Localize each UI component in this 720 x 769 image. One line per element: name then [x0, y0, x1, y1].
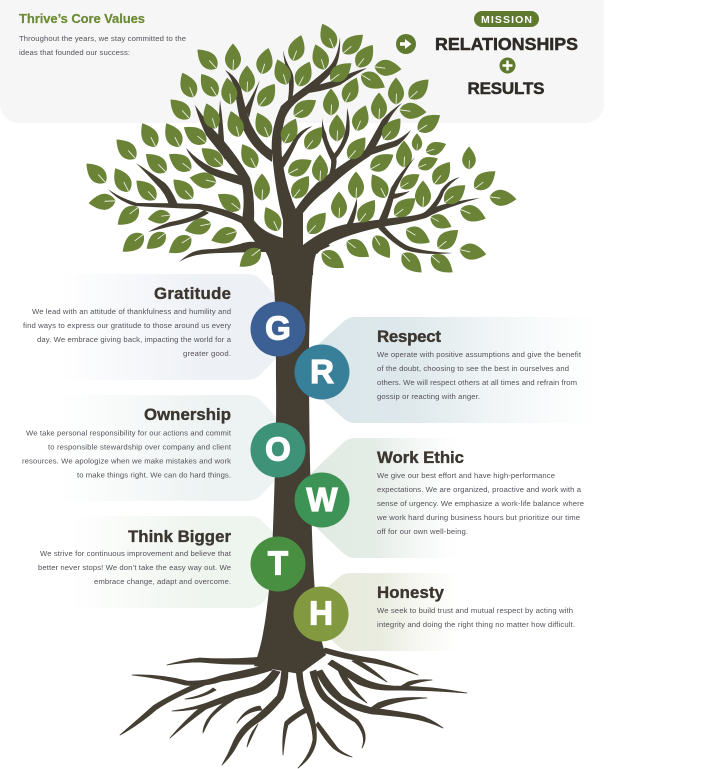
mission badge: MISSION	[481, 14, 532, 26]
Honesty arrow shape	[300, 573, 460, 651]
Respect text: others. We will respect others at all times and refrain from	[377, 378, 577, 387]
Gratitude text: greater good.	[183, 349, 231, 358]
Think Bigger text: better never stops! We don’t take the easy way out. We	[38, 563, 231, 572]
intro text: ideas that founded our success:	[19, 48, 130, 57]
Work Ethic text	[376, 471, 584, 536]
Respect text: gossip or reacting with anger.	[377, 392, 480, 401]
Honesty text	[377, 606, 575, 629]
icon: plus circle	[500, 58, 516, 74]
mission badge	[474, 11, 539, 27]
Ownership heading: Ownership	[144, 405, 231, 424]
tree trunk and branches	[108, 37, 480, 674]
circle: G	[250, 302, 306, 356]
circle: W	[294, 472, 350, 528]
panel: Ownership	[22, 395, 306, 501]
Gratitude text: day. We embrace giving back, impacting the world for a	[37, 335, 232, 344]
circle: O	[250, 422, 306, 478]
Ownership text: We take personal responsibility for our actions and commit	[26, 428, 232, 438]
panel: Respect	[290, 317, 600, 423]
Ownership text: to responsible stewardship over company and client	[48, 442, 232, 452]
Ownership text: to make things right. We can do hard things.	[77, 470, 231, 480]
panel: header	[0, 0, 604, 123]
Respect text	[377, 350, 582, 401]
Think Bigger arrow shape	[70, 516, 303, 608]
Gratitude text: find ways to express our gratitude to those around us every	[23, 321, 231, 330]
Think Bigger text	[38, 549, 232, 586]
intro text	[19, 34, 186, 57]
circle: H: H	[309, 594, 333, 632]
Respect text: of the doubt, choosing to see the best in ourselves and	[377, 364, 569, 373]
Gratitude text: We lead with an attitude of thankfulness and humility and	[32, 307, 231, 316]
Honesty text: integrity and doing the right thing no matter how difficult.	[377, 620, 575, 629]
Gratitude heading: Gratitude	[154, 284, 231, 303]
circle: R: R	[310, 353, 334, 390]
tree illustration	[81, 20, 517, 768]
Honesty heading: Honesty	[377, 583, 445, 602]
Think Bigger heading: Think Bigger	[128, 527, 231, 546]
icon: arrow circle	[396, 34, 416, 54]
Respect text: We operate with positive assumptions and give the benefit	[377, 350, 582, 359]
circle: R	[294, 344, 350, 400]
Work Ethic text: We give our best effort and have high-performance	[377, 471, 555, 480]
Respect heading: Respect	[377, 327, 441, 346]
Work Ethic text: sense of urgency. We emphasize a work-life balance where	[377, 499, 584, 508]
Think Bigger text: We strive for continuous improvement and believe that	[40, 549, 232, 558]
Honesty text: We seek to build trust and mutual respect by acting with	[377, 606, 573, 615]
Work Ethic text: we work hard during business hours but prioritize our time	[376, 513, 580, 522]
circle: G: G	[265, 310, 291, 346]
Think Bigger text: embrace change, adapt and overcome.	[94, 577, 231, 586]
Gratitude text	[23, 307, 232, 358]
heading: Thrive's Core Values: Thrive’s Core Values	[19, 11, 145, 26]
label: relationships: RELATIONSHIPS	[435, 34, 578, 54]
Work Ethic text: expectations. We are organized, proactive and work with a	[377, 485, 582, 494]
Respect arrow shape	[290, 317, 600, 423]
circle: T: T	[268, 544, 288, 582]
circle: W: W	[306, 481, 338, 518]
circle: O: O	[265, 430, 291, 468]
tree leaves	[81, 20, 517, 279]
circle: H	[294, 586, 348, 642]
Work Ethic arrow shape	[285, 438, 460, 558]
panel: Work Ethic	[285, 438, 584, 558]
circle: T	[250, 536, 306, 592]
Ownership text: resources. We apologize when we make mistakes and work	[22, 456, 231, 466]
label: results: RESULTS	[468, 79, 544, 98]
panel: Gratitude	[23, 274, 306, 380]
tree roots	[120, 648, 467, 768]
Ownership text	[22, 428, 232, 480]
header background	[0, 0, 604, 123]
panel: Think Bigger	[38, 516, 303, 608]
Work Ethic heading: Work Ethic	[377, 448, 464, 467]
GROWTH letter circles	[250, 302, 350, 642]
Ownership arrow shape	[60, 395, 306, 501]
Gratitude arrow shape	[60, 274, 306, 380]
intro text: Throughout the years, we stay committed to the	[19, 34, 186, 43]
Work Ethic text: off for our own well-being.	[377, 527, 468, 536]
panel: Honesty	[300, 573, 575, 651]
